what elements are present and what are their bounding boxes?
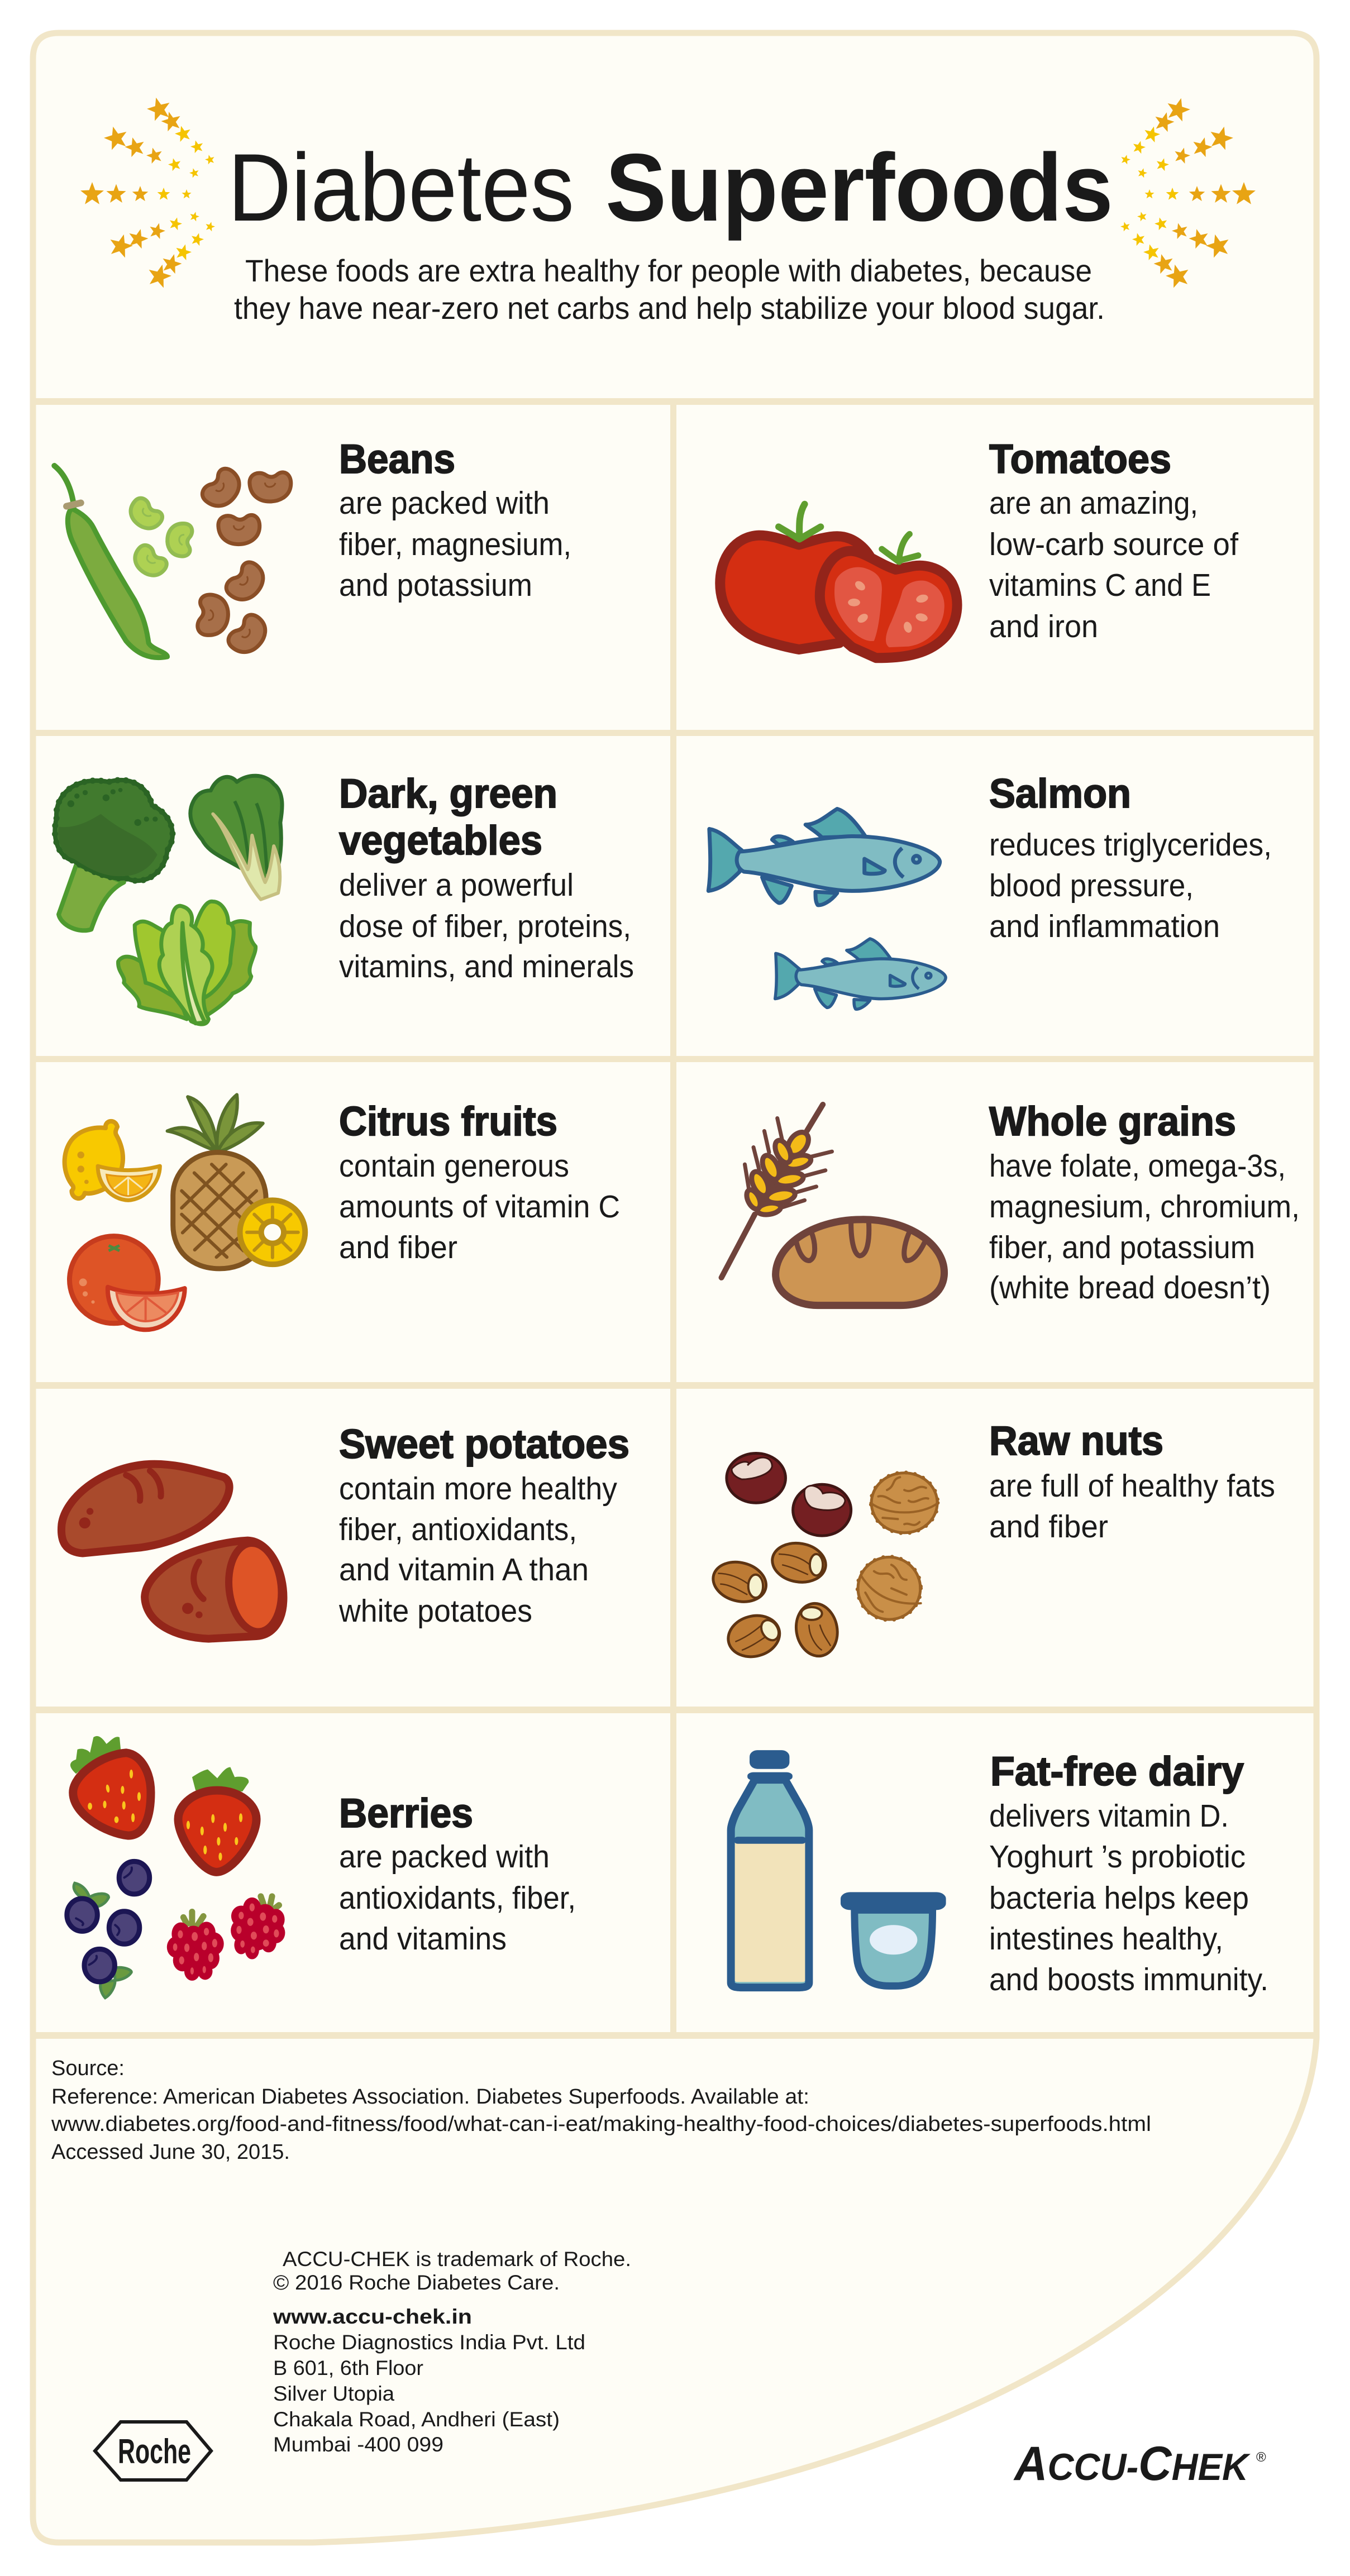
logo: Roche: Roche (118, 2432, 191, 2471)
text: whole grains: have folate, omega-3s, (989, 1148, 1286, 1184)
text: dark green vegetables: dose of fiber, proteins, (339, 909, 631, 944)
icon: strawberries (70, 1736, 256, 1872)
panel: sweet potatoes (61, 1422, 629, 1639)
text: fat-free dairy: Yoghurt ’s probiotic (989, 1839, 1246, 1875)
source note: www.diabetes.org/food-and-fitness/food/what-can-i-eat/making-healthy-food-choices/diabetes-superfoods.html (51, 2113, 1151, 2136)
icon: left star burst (80, 94, 216, 289)
panel: berries (67, 1736, 576, 1998)
trademark and address: B 601, 6th Floor (273, 2357, 423, 2379)
icon: wheat (722, 1105, 832, 1278)
trademark and address: ACCU-CHEK is trademark of Roche. (283, 2248, 631, 2271)
text: berries (339, 1791, 576, 1957)
text: whole grains: magnesium, chromium, (989, 1189, 1300, 1225)
trademark and address: Silver Utopia (273, 2382, 394, 2405)
text: salmon: and inflammation (989, 909, 1220, 944)
text: whole grains: fiber, and potassium (989, 1230, 1255, 1265)
text: citrus fruits (339, 1099, 620, 1265)
icon: pineapple (168, 1095, 266, 1269)
trademark and address: www.accu-chek.in (273, 2305, 472, 2328)
text: beans: fiber, magnesium, (339, 527, 571, 562)
panel: whole grains (722, 1099, 1300, 1306)
panel: salmon (708, 771, 1272, 1009)
title: Superfoods (605, 134, 1113, 241)
trademark and address: © 2016 Roche Diabetes Care. (273, 2271, 560, 2294)
text: beans: and potassium (339, 567, 532, 603)
header (80, 94, 1256, 326)
source note: Accessed June 30, 2015. (51, 2140, 290, 2164)
panel: citrus fruits (65, 1095, 620, 1330)
trademark and address: Mumbai -400 099 (273, 2433, 443, 2456)
text: salmon: Salmon (989, 771, 1131, 816)
icon: tomatoes (720, 504, 957, 658)
trademark and address: Chakala Road, Andheri (East) (273, 2408, 560, 2431)
text: sweet potatoes (338, 1422, 629, 1629)
icon: bread loaf (776, 1220, 944, 1306)
subtitle: they have near-zero net carbs and help stabilize your blood sugar. (234, 290, 1105, 326)
icon: chestnuts (727, 1453, 851, 1536)
icon: milk bottle (731, 1750, 809, 1987)
text: dark green vegetables: deliver a powerful (339, 867, 574, 903)
text: fat-free dairy: bacteria helps keep (989, 1880, 1249, 1916)
subtitle (234, 253, 1105, 326)
text: dark green vegetables: vitamins, and minerals (339, 949, 634, 984)
text: beans (339, 437, 571, 603)
logo: Roche (95, 2422, 211, 2480)
text: berries: and vitamins (339, 1921, 507, 1957)
icon: lemon (65, 1121, 160, 1200)
text: fat-free dairy: intestines healthy, (989, 1921, 1223, 1957)
text: tomatoes (989, 437, 1238, 644)
panel: fat-free dairy (731, 1749, 1268, 1997)
panel: raw nuts (709, 1418, 1275, 1662)
icon: walnuts (857, 1473, 938, 1620)
icon: large salmon (708, 809, 940, 905)
subtitle: These foods are extra healthy for people with diabetes, because (245, 253, 1092, 288)
text: sweet potatoes: and vitamin A than (339, 1552, 589, 1588)
text: berries: Berries (339, 1791, 473, 1836)
trademark and address (273, 2248, 631, 2456)
text: raw nuts: and fiber (989, 1509, 1108, 1545)
text: whole grains: (white bread doesn’t) (989, 1270, 1271, 1306)
text: whole grains: Whole grains (989, 1099, 1236, 1144)
icon: raspberries (167, 1896, 285, 1981)
text: citrus fruits: Citrus fruits (339, 1099, 557, 1144)
text: berries: antioxidants, fiber, (339, 1880, 576, 1916)
logo: Accu-Chek: ACCU-CHEK (1013, 2437, 1251, 2491)
text: sweet potatoes: fiber, antioxidants, (339, 1512, 577, 1547)
text: fat-free dairy: and boosts immunity. (989, 1962, 1268, 1997)
icon: orange (69, 1236, 185, 1330)
source note (51, 2057, 1151, 2164)
text: citrus fruits: contain generous (339, 1148, 569, 1184)
text: dark green vegetables: vegetables (339, 818, 542, 863)
text: whole grains (989, 1099, 1300, 1306)
text: sweet potatoes: white potatoes (338, 1593, 532, 1629)
text: tomatoes: Tomatoes (989, 437, 1171, 482)
title (228, 134, 1113, 241)
text: fat-free dairy: delivers vitamin D. (989, 1798, 1229, 1834)
text: raw nuts (989, 1418, 1275, 1545)
text: tomatoes: low-carb source of (989, 527, 1238, 562)
icon: blueberries (67, 1861, 150, 1998)
text: tomatoes: are an amazing, (989, 485, 1198, 521)
text: fat-free dairy (989, 1749, 1268, 1997)
icon: broccoli (55, 780, 173, 930)
text: beans: Beans (339, 437, 455, 482)
text: dark green vegetables: Dark, green (339, 771, 557, 816)
logo: Accu-Chek: ® (1256, 2450, 1266, 2465)
text: raw nuts: are full of healthy fats (989, 1468, 1275, 1504)
text: tomatoes: and iron (989, 609, 1098, 644)
title: Diabetes (228, 134, 574, 241)
text: citrus fruits: amounts of vitamin C (339, 1189, 620, 1225)
icon: right star burst (1119, 95, 1256, 289)
text: berries: are packed with (339, 1839, 550, 1875)
source note: Reference: American Diabetes Association. Diabetes Superfoods. Available at: (51, 2085, 809, 2109)
text: sweet potatoes: Sweet potatoes (339, 1422, 629, 1467)
icon: almonds (709, 1539, 842, 1662)
icon: pineapple ring (240, 1200, 305, 1264)
panel: beans (54, 437, 571, 659)
icon: lettuce (118, 901, 256, 1024)
icon: small salmon (775, 939, 946, 1009)
text: tomatoes: vitamins C and E (989, 567, 1211, 603)
text: dark green vegetables (339, 771, 634, 984)
trademark and address: Roche Diagnostics India Pvt. Ltd (273, 2331, 585, 2354)
text: beans: are packed with (339, 485, 550, 521)
text: sweet potatoes: contain more healthy (339, 1471, 617, 1507)
text: raw nuts: Raw nuts (989, 1418, 1163, 1464)
icon: yoghurt cup (841, 1892, 946, 1986)
panel: tomatoes (720, 437, 1238, 658)
panel: dark green vegetables (55, 771, 634, 1024)
text: salmon: reduces triglycerides, (989, 827, 1272, 863)
icon: brown beans (197, 465, 292, 659)
text: salmon (989, 771, 1272, 944)
text: salmon: blood pressure, (989, 868, 1194, 904)
icon: chard leaf (190, 776, 282, 900)
source note: Source: (51, 2057, 125, 2080)
text: fat-free dairy: Fat-free dairy (990, 1749, 1244, 1794)
icon: sweet potatoes (61, 1464, 286, 1639)
text: citrus fruits: and fiber (339, 1230, 457, 1265)
icon: green bean pod (54, 466, 193, 658)
